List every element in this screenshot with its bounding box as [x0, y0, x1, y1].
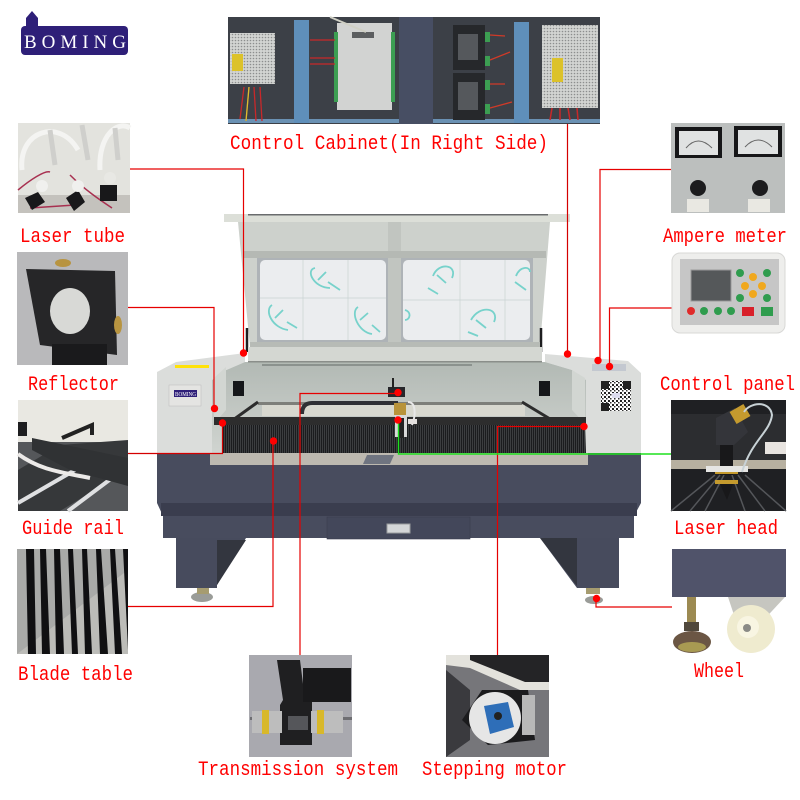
- connector: ampere meter: [594, 170, 671, 364]
- left side label plate: BOMING: [175, 392, 197, 398]
- cabinet photo: [228, 17, 600, 124]
- panel: wheel: [672, 549, 786, 684]
- cabinet label: Control Cabinet(In Right Side): [230, 133, 548, 156]
- guide rail label: Guide rail: [22, 518, 124, 541]
- connector: stepping motor: [498, 423, 588, 655]
- panel: blade table: [17, 549, 133, 687]
- lid: [224, 214, 570, 362]
- connector: wheel: [593, 595, 672, 607]
- cable chain: [302, 403, 398, 414]
- work area interior: [212, 362, 586, 453]
- control panel photo: [672, 253, 785, 333]
- panel: reflector: [17, 252, 128, 397]
- cutting table: [222, 425, 586, 453]
- reflector label: Reflector: [28, 374, 119, 397]
- panel: stepping motor: [422, 655, 567, 782]
- panel: control cabinet: [228, 17, 600, 156]
- panel: transmission system: [198, 655, 398, 782]
- panel: laser head: [671, 400, 786, 541]
- logo: Boming: [21, 11, 128, 55]
- lid window right: [403, 260, 530, 340]
- laser tube photo: [18, 123, 130, 213]
- levelling feet: [191, 588, 603, 604]
- laser cutting machine: [157, 214, 641, 604]
- front stainless plate: [210, 453, 588, 465]
- blade table photo: [17, 549, 128, 654]
- ampere meter photo: [671, 123, 785, 213]
- connector: control panel: [606, 308, 672, 370]
- blade table label: Blade table: [18, 664, 133, 687]
- logo: Boming: BOMING: [24, 32, 126, 53]
- stepping motor label: Stepping motor: [422, 759, 567, 782]
- panel: laser tube: [18, 123, 130, 249]
- panel: control panel: [660, 253, 795, 397]
- laser head photo: [671, 400, 786, 511]
- laser tube label: Laser tube: [20, 226, 125, 249]
- laser head on gantry: [388, 378, 417, 438]
- machine legs: [176, 538, 619, 588]
- connector: reflector: [128, 308, 218, 412]
- panel: ampere meter: [663, 123, 787, 249]
- connector: control cabinet: [564, 124, 571, 358]
- side housing right: [545, 354, 641, 453]
- reflector photo: [17, 252, 128, 365]
- connector: transmission system: [300, 389, 402, 655]
- gantry rail: [214, 417, 586, 425]
- connector: blade table: [128, 437, 277, 606]
- transmission label: Transmission system: [198, 759, 398, 782]
- left side label plate: [169, 365, 209, 406]
- connector: guide rail: [128, 419, 226, 454]
- panel: guide rail: [18, 400, 128, 541]
- machine base body: [157, 453, 641, 539]
- transmission photo: [249, 655, 352, 757]
- wheel photo: [672, 549, 786, 653]
- laser head label: Laser head: [674, 518, 778, 541]
- stepping motor photo: [446, 655, 549, 757]
- wheel label: Wheel: [694, 661, 744, 684]
- guide rail photo: [18, 400, 128, 511]
- lid window left: [260, 260, 386, 340]
- right side control strip: [592, 364, 626, 371]
- connector: laser tube: [130, 169, 247, 357]
- connector: laser head (green): [394, 416, 671, 454]
- gas struts: [247, 328, 541, 352]
- QR code: [601, 381, 631, 411]
- side housing left: [157, 353, 245, 453]
